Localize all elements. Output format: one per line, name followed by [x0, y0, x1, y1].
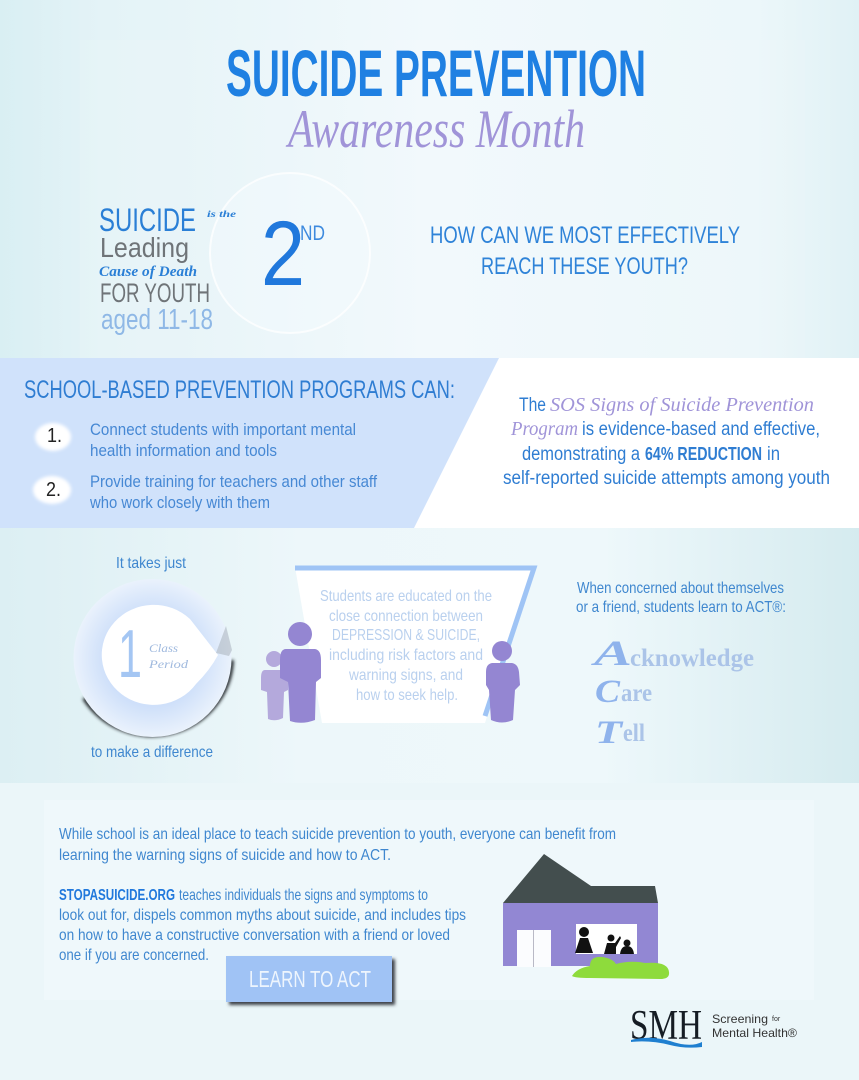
text: stopasuicide: look out for, dispels common myths about suicide, and includes tips: [59, 907, 466, 924]
callout: SOS program: Program: [510, 418, 578, 440]
number: 2nd: 2: [261, 203, 305, 305]
item 1 text: Connect students with important mental: [90, 420, 356, 439]
bullet 2: 2.: [46, 479, 61, 501]
button: learn to act: LEARN TO ACT: [249, 966, 371, 992]
text: to make a difference: to make a difference: [91, 744, 213, 761]
text: stopasuicide: teaches individuals the signs and symptoms to: [179, 887, 428, 904]
text: for youth: FOR YOUTH: [100, 278, 210, 308]
icon: child: [261, 651, 288, 720]
item 1 text: health information and tools: [90, 441, 277, 460]
heading: awareness month: Awareness Month: [286, 99, 585, 159]
acknowledge: cknowledge: [630, 645, 754, 672]
board frame: [295, 568, 534, 716]
text: stopasuicide: STOPASUICIDE.ORG: [59, 887, 175, 904]
text: cause of death: Cause of Death: [99, 264, 197, 280]
top background glow: [80, 40, 805, 358]
logo: SMH: for: [772, 1016, 781, 1023]
panel: school-based programs: [0, 358, 499, 528]
title: [226, 36, 646, 159]
callout: SOS program: The: [519, 395, 546, 416]
stat: one class period: [74, 555, 232, 761]
logo: SMH: Screening: [712, 1012, 768, 1026]
text: act intro: When concerned about themselves: [577, 580, 784, 597]
board text: close connection between: [329, 608, 483, 625]
text: class period: Period: [148, 657, 189, 671]
statistic: second leading cause: [99, 173, 370, 336]
band: white background right: [0, 358, 859, 528]
icon: teacher: [486, 641, 520, 722]
text: stopasuicide: [59, 887, 466, 964]
heading: programs: SCHOOL-BASED PREVENTION PROGRAMS CAN:: [24, 376, 455, 404]
tell: T: [595, 715, 624, 751]
acknowledge: A: [591, 633, 632, 673]
question: HOW CAN WE MOST EFFECTIVELY: [430, 222, 740, 249]
dial notch: [216, 626, 232, 656]
callout: SOS program: SOS Signs of Suicide Prevention: [550, 394, 814, 416]
board text: warning signs, and: [348, 667, 463, 684]
bush: [572, 957, 669, 979]
board text: including risk factors and: [329, 647, 483, 664]
text: stopasuicide: one if you are concerned.: [59, 947, 209, 964]
icon: adult: [280, 622, 321, 723]
item 2 text: who work closely with them: [89, 493, 270, 512]
bullet 1: 1.: [47, 425, 62, 447]
text: school intro: [59, 826, 616, 864]
logo: SMH: [630, 1003, 797, 1049]
callout: SOS program: demonstrating a: [522, 444, 640, 465]
block: ACT: [576, 580, 786, 751]
text: act intro: [576, 580, 786, 616]
dial: [74, 579, 232, 737]
dial centre: [102, 605, 218, 705]
board text: how to seek help.: [356, 687, 458, 704]
text: suicide: SUICIDE: [99, 202, 196, 238]
tell: ell: [623, 720, 645, 747]
bullet 2: [33, 476, 71, 504]
statistic: second leading cause: ND: [300, 222, 325, 245]
question: REACH THESE YOUTH?: [481, 253, 688, 280]
text: school intro: learning the warning signs of suicide and how to ACT.: [59, 847, 391, 864]
text: stopasuicide: on how to have a constructive conversation with a friend or loved: [59, 927, 450, 944]
bullet 1: [35, 423, 71, 451]
callout: SOS program: self-reported suicide attempts among youth: [503, 468, 830, 489]
callout: SOS program: in: [767, 444, 780, 465]
callout: SOS program: is evidence-based and effective,: [582, 419, 820, 440]
panel: classroom board: [261, 567, 534, 723]
family silhouettes: [575, 927, 634, 954]
section: middle background: [0, 528, 859, 783]
logo: SMH: Mental Health®: [712, 1026, 797, 1040]
care: [595, 674, 652, 710]
text: act intro: or a friend, students learn to ACT®:: [576, 599, 786, 616]
text: aged 11-18: aged 11-18: [101, 304, 213, 336]
callout: SOS program: 64% REDUCTION: [645, 444, 762, 464]
board text: Students are educated on the: [320, 588, 492, 605]
text: leading: Leading: [100, 232, 189, 263]
dial ring: [74, 579, 232, 737]
tell: [595, 715, 645, 751]
icon: house: [503, 854, 669, 979]
section: footer background: [0, 783, 859, 1080]
board text: DEPRESSION & SUICIDE,: [332, 627, 480, 644]
text: it takes just: It takes just: [116, 555, 186, 572]
decorative ring: [210, 173, 370, 333]
callout: SOS program: [503, 394, 830, 489]
text: class period: [148, 641, 189, 671]
text: class period: Class: [149, 641, 178, 655]
care: are: [621, 680, 652, 707]
button: learn to act: [226, 956, 395, 1005]
item 2 text: [89, 472, 377, 512]
text: school intro: While school is an ideal place to teach suicide prevention to youth, everyone can benefit from: [59, 826, 616, 843]
acknowledge: [591, 633, 754, 673]
text: is the: is the: [207, 209, 236, 219]
number: 1: 1: [118, 616, 142, 692]
item 1 text: [90, 420, 356, 460]
item 2 text: Provide training for teachers and other staff: [90, 472, 377, 491]
footer panel: [44, 800, 814, 1000]
board text: [320, 588, 492, 704]
dial shadow: [84, 660, 232, 735]
question: [430, 222, 740, 280]
care: C: [595, 674, 621, 710]
logo: SMH: SMH: [630, 1003, 702, 1049]
